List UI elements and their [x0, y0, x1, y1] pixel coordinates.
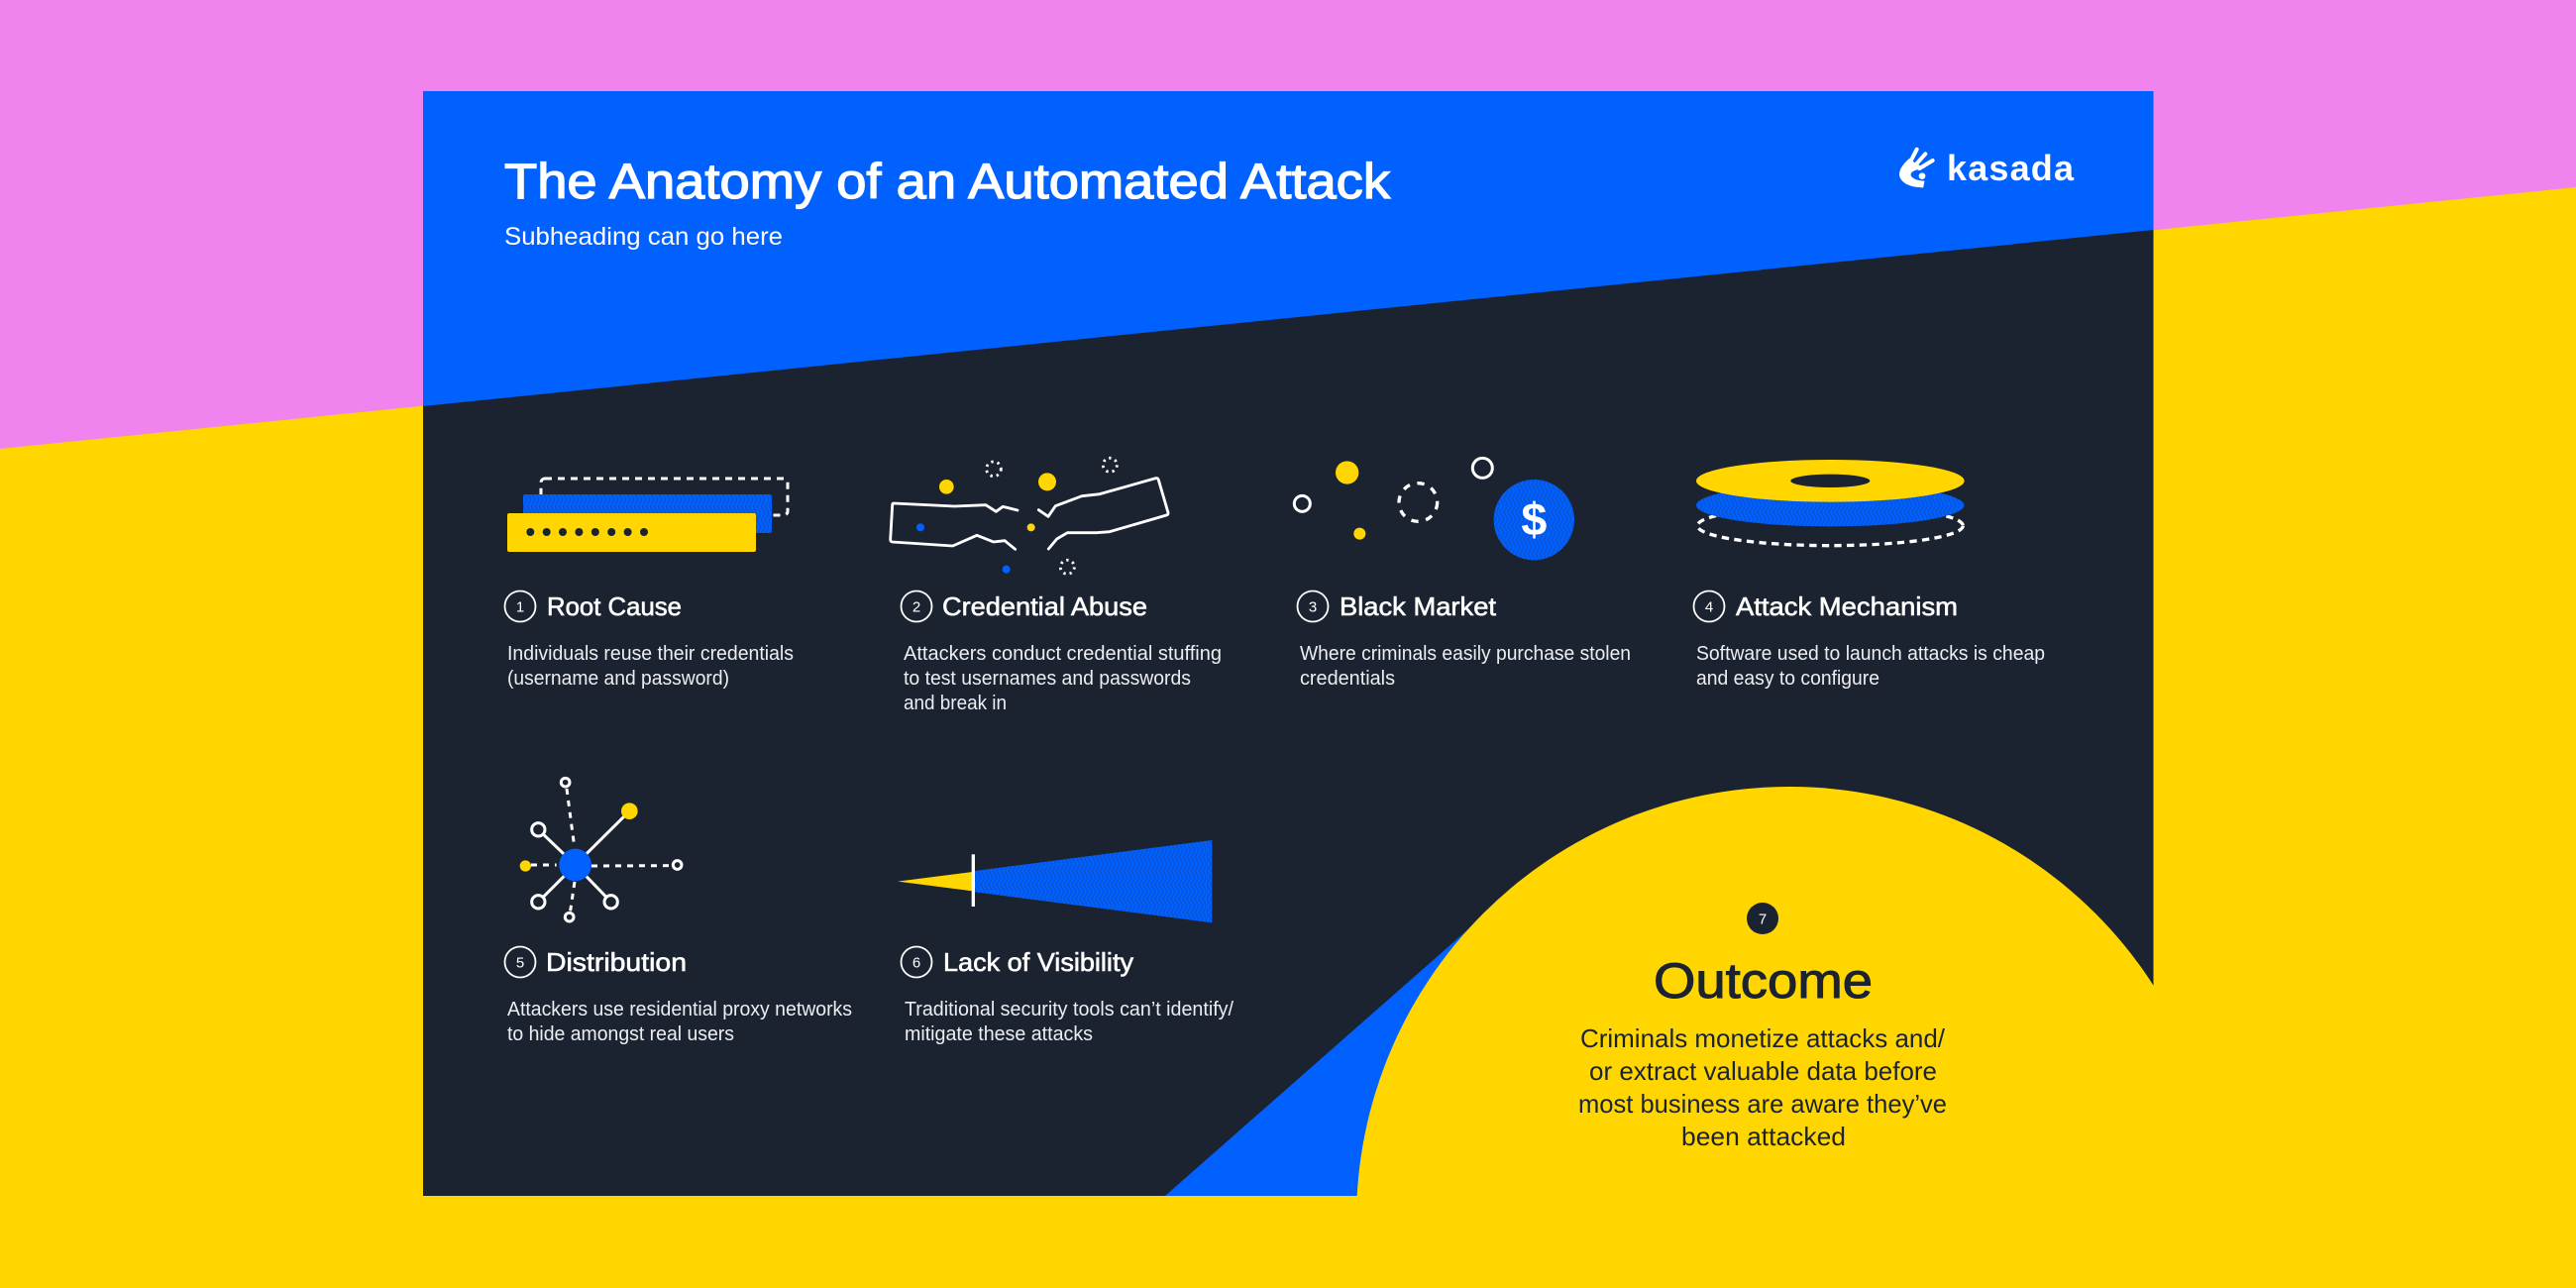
badge 4: 4 — [1705, 598, 1713, 616]
panel: dark main area — [423, 91, 2154, 1196]
step 6: Lack of Visibility — [898, 840, 1234, 1045]
description: mitigate these attacks — [905, 1023, 1093, 1045]
wordmark: kasada — [1947, 148, 2075, 188]
description: (username and password) — [507, 668, 729, 690]
icon: stacked discs — [1696, 460, 1965, 546]
title: The Anatomy of an Automated Attack — [504, 154, 1391, 209]
description: and break in — [904, 693, 1007, 714]
description: to test usernames and passwords — [904, 668, 1191, 690]
description — [1300, 643, 1631, 690]
badge 7: 7 — [1759, 912, 1767, 927]
icon: visibility cone — [898, 840, 1212, 922]
description — [1578, 1023, 1947, 1151]
step 3: Black Market — [1294, 458, 1631, 690]
icon: password field layers — [507, 479, 788, 552]
icon: coins and dollar: $ — [1521, 493, 1547, 545]
heading: Root Cause — [547, 591, 682, 621]
description — [507, 643, 794, 690]
icon: broken credential card — [891, 458, 1168, 574]
panel: blue header — [423, 91, 2154, 406]
panel: outcome yellow dome — [1356, 787, 2222, 1220]
icon: kasada hand — [1900, 150, 1933, 187]
heading: Lack of Visibility — [943, 947, 1133, 977]
heading: Outcome — [1654, 953, 1873, 1009]
subheading: Subheading can go here — [504, 223, 783, 251]
badge 5 — [505, 947, 535, 977]
icon: network hub — [520, 778, 682, 921]
step 5: Distribution — [505, 778, 852, 1045]
description — [507, 999, 852, 1045]
badge 6: 6 — [912, 955, 920, 971]
description: Attackers conduct credential stuffing — [904, 643, 1222, 665]
description: Attackers use residential proxy networks — [507, 999, 852, 1020]
badge 3 — [1298, 590, 1328, 622]
description: Where criminals easily purchase stolen — [1300, 643, 1631, 665]
description — [1696, 643, 2045, 690]
heading: Distribution — [546, 947, 687, 977]
step 4: Attack Mechanism — [1694, 460, 2045, 690]
logo: kasada — [1900, 148, 2075, 188]
heading: Black Market — [1340, 591, 1497, 621]
description: Individuals reuse their credentials — [507, 643, 794, 665]
description — [904, 643, 1222, 714]
badge 7 — [1747, 903, 1778, 934]
step 2: Credential Abuse — [891, 458, 1222, 714]
description: credentials — [1300, 668, 1395, 690]
badge 2 — [902, 590, 931, 622]
badge 3: 3 — [1309, 598, 1317, 616]
description: Software used to launch attacks is cheap — [1696, 643, 2045, 665]
description: been attacked — [1681, 1122, 1846, 1151]
badge 1 — [505, 590, 535, 622]
description: Criminals monetize attacks and/ — [1580, 1023, 1946, 1053]
badge 5: 5 — [516, 955, 524, 971]
badge 4 — [1694, 590, 1724, 622]
badge 1: 1 — [516, 598, 524, 616]
heading: Attack Mechanism — [1736, 591, 1958, 621]
description: Traditional security tools can’t identify/ — [905, 999, 1234, 1020]
description — [905, 999, 1234, 1045]
badge 2: 2 — [912, 598, 920, 616]
blue wedge behind outcome — [1165, 913, 1486, 1196]
icon: coins and dollar — [1294, 458, 1574, 560]
heading: Credential Abuse — [942, 591, 1147, 621]
step 1: Root Cause — [505, 479, 794, 690]
step 7: Outcome — [1578, 903, 1947, 1151]
description: most business are aware they’ve — [1578, 1089, 1947, 1119]
description: to hide amongst real users — [507, 1023, 734, 1045]
badge 6 — [902, 947, 931, 977]
description: and easy to configure — [1696, 668, 1879, 690]
description: or extract valuable data before — [1589, 1056, 1937, 1086]
